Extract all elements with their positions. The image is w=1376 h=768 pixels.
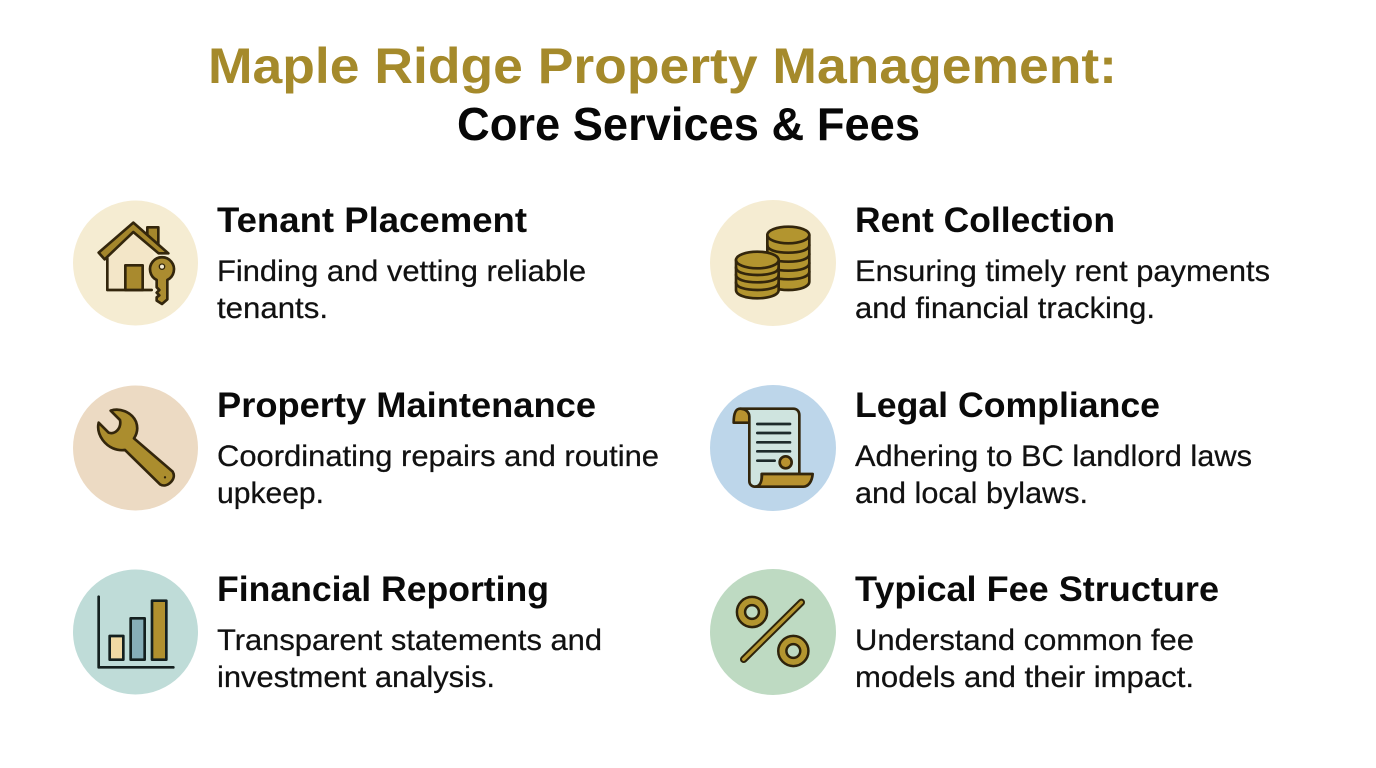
description: Adhering to BC landlord laws xyxy=(855,440,1252,473)
description: and local bylaws. xyxy=(855,477,1088,510)
panel: typical fee structure xyxy=(710,569,1219,695)
description xyxy=(855,440,1252,510)
heading: Property Maintenance xyxy=(217,386,596,425)
description: Ensuring timely rent payments xyxy=(855,255,1270,288)
icon: bar chart xyxy=(73,570,198,694)
description: Coordinating repairs and routine xyxy=(217,440,659,473)
panel: tenant placement xyxy=(73,200,586,326)
description: tenants. xyxy=(217,292,328,325)
description: Understand common fee xyxy=(855,624,1194,657)
description xyxy=(217,440,659,510)
title: Maple Ridge Property Management: xyxy=(208,38,1117,94)
panel: financial reporting xyxy=(73,570,602,694)
panel: legal compliance xyxy=(710,385,1252,511)
icon: wrench xyxy=(73,386,198,510)
description: Finding and vetting reliable xyxy=(217,255,586,288)
description xyxy=(855,624,1194,694)
heading: Typical Fee Structure xyxy=(855,570,1219,609)
description xyxy=(855,255,1270,325)
title: Core Services & Fees xyxy=(457,98,920,150)
description: models and their impact. xyxy=(855,661,1194,694)
panel: rent collection xyxy=(710,200,1270,326)
description: upkeep. xyxy=(217,477,324,510)
description xyxy=(217,255,586,325)
icon: coin stacks xyxy=(710,200,836,326)
heading: Legal Compliance xyxy=(855,386,1160,425)
icon: percent sign xyxy=(710,569,836,695)
heading: Financial Reporting xyxy=(217,570,549,609)
icon: house and key xyxy=(73,200,198,326)
panel: property maintenance xyxy=(73,386,659,510)
heading: Rent Collection xyxy=(855,201,1115,240)
title xyxy=(208,38,1117,150)
heading: Tenant Placement xyxy=(217,201,527,240)
description xyxy=(217,624,602,694)
description: and financial tracking. xyxy=(855,292,1155,325)
description: Transparent statements and xyxy=(217,624,602,657)
description: investment analysis. xyxy=(217,661,495,694)
icon: legal scroll xyxy=(710,385,836,511)
